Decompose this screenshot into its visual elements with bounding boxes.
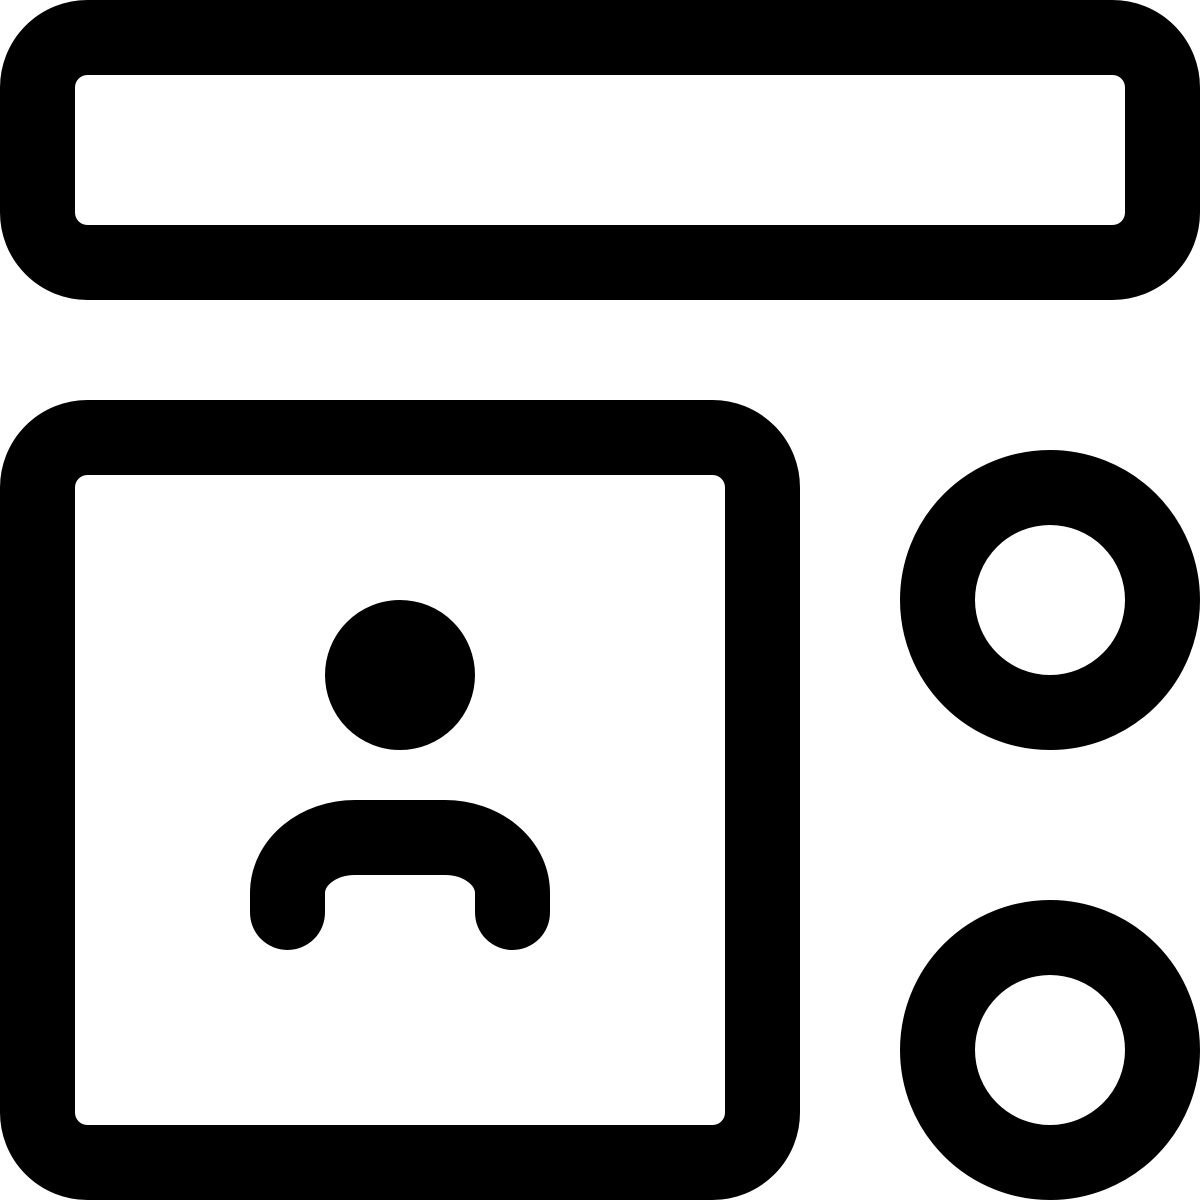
circle: bottom option [938,938,1162,1162]
icon: user head [362,638,438,712]
icon: user shoulders [288,838,512,912]
circle: top option [938,488,1162,712]
header bar [38,38,1162,262]
profile card [38,438,762,1162]
